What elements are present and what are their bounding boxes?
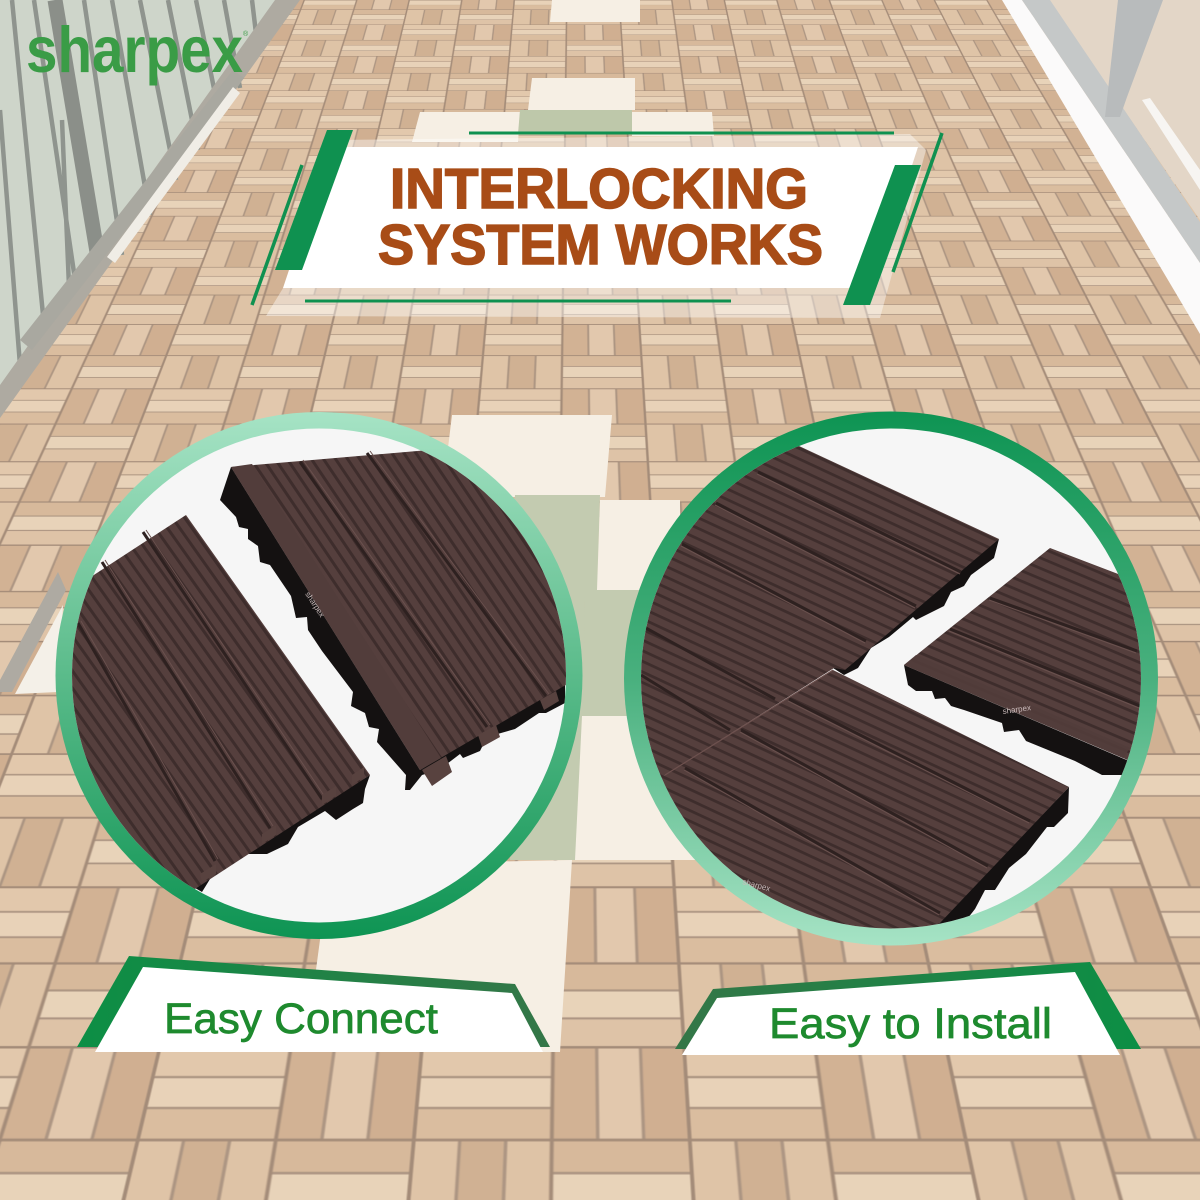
label: easy to install <box>675 962 1141 1055</box>
banner left green bar <box>275 130 353 270</box>
logo: sharpex: ® <box>243 30 249 38</box>
small brand mark on left tile: sharpex <box>303 590 326 619</box>
banner green accent lines <box>252 133 942 305</box>
right deck tile pieces <box>641 446 1141 928</box>
logo: sharpex: sharpex <box>26 13 243 86</box>
banner white plate <box>283 147 918 288</box>
title text: SYSTEM WORKS <box>378 213 823 277</box>
title banner <box>252 130 942 318</box>
left deck tile pieces <box>72 450 566 892</box>
banner translucent backing <box>266 134 926 318</box>
small brand marks on right tiles <box>741 703 1031 893</box>
background: garden and railing, top left <box>0 0 300 694</box>
banner right green bar <box>843 165 921 305</box>
label: easy to install: Easy to Install <box>769 1000 1052 1048</box>
label: easy connect <box>77 956 550 1052</box>
background: pale stone slabs and grass strip <box>305 0 714 1052</box>
left circle plate <box>72 428 566 922</box>
label: easy connect: Easy Connect <box>164 995 438 1043</box>
panel: right circle photo, easy to install <box>624 412 1158 946</box>
left circle ring <box>56 412 582 939</box>
right circle plate <box>641 428 1141 928</box>
right circle ring <box>624 412 1158 946</box>
small brand marks on right tiles: sharpex <box>741 877 771 893</box>
small brand marks on right tiles: sharpex <box>1002 703 1031 716</box>
title text: INTERLOCKING <box>390 157 808 221</box>
background: glass wall and gravel, top right <box>1002 0 1200 334</box>
panel: left circle photo, easy connect <box>56 412 582 939</box>
